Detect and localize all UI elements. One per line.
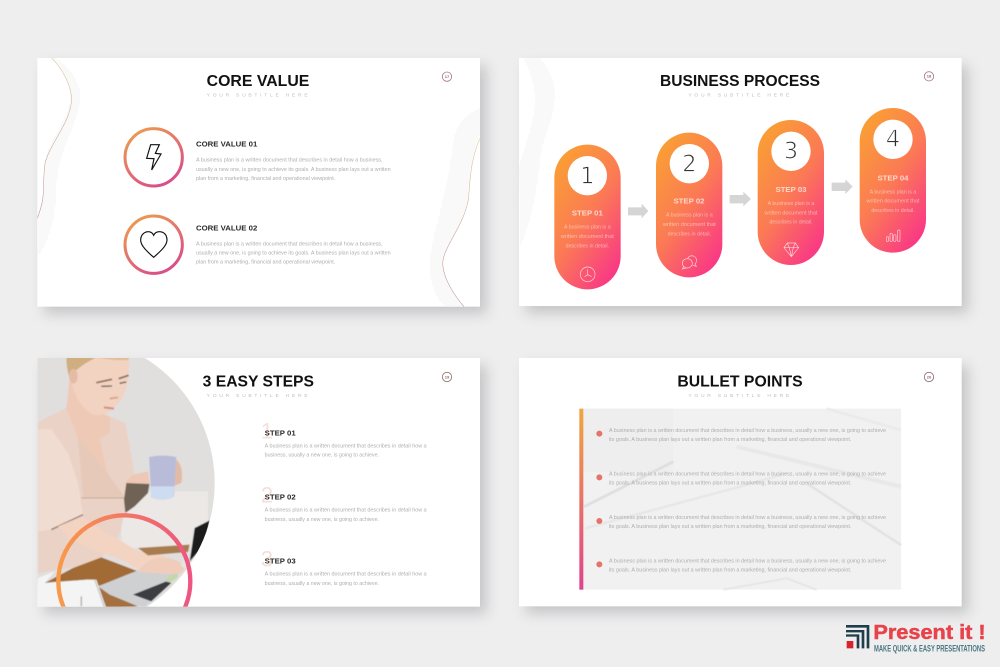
logo: Present it! (846, 622, 986, 654)
step 01: A business plan is a written document that describes in detail how a (265, 443, 427, 449)
page number: 17 (445, 74, 450, 79)
step 02: 2 (261, 483, 273, 508)
bullet 1: A business plan is a written document that describes in detail how a business, usually a new one, is going to achieve (609, 428, 886, 434)
step 03: 3 (261, 547, 273, 572)
step 1 card: 1 (580, 163, 595, 189)
step 2 card: 2 (682, 151, 697, 177)
page number (924, 372, 934, 382)
text block: core value 02: A business plan is a written document that describes in detail how a business, (196, 241, 383, 247)
bullet 3: A business plan is a written document that describes in detail how a business, usually a new one, is going to achieve (609, 515, 886, 521)
icon: chat bubbles (682, 256, 697, 269)
step 1 card: describes in detail. (566, 243, 609, 249)
page number (924, 72, 934, 81)
step 3 card: describes in detail. (769, 220, 813, 226)
arrow 2 (730, 192, 751, 206)
title: BUSINESS PROCESS (660, 73, 820, 90)
panel: business process (519, 58, 968, 313)
icon: diamond (784, 243, 799, 257)
bullet 3 (596, 515, 886, 530)
text block: core value 02: plan from a marketing, financial and operational viewpoint. (196, 260, 335, 266)
step 1 card (554, 145, 621, 289)
bullet 3: its goals. A business plan lays out a written plan from a marketing, financial and operational viewpoint. (609, 524, 851, 530)
text block: core value 02: usually a new one, is going to achieve its goals. A business plan lays out a written (196, 250, 391, 256)
step 4 card: written document that (866, 199, 920, 205)
text block: core value 01 (196, 158, 391, 182)
page number: 19 (445, 374, 450, 379)
bullet 4: A business plan is a written document that describes in detail how a business, usually a new one, is going to achieve (609, 559, 886, 565)
icon: bar chart (886, 230, 900, 241)
step 01: 1 (261, 419, 273, 444)
step 2 card: written document that (663, 222, 716, 228)
step 4 card: STEP 04 (877, 173, 909, 182)
step 01 (261, 419, 427, 459)
logo name: Present it ! (873, 622, 986, 644)
icon: heart in ring (125, 216, 182, 273)
bullet 2: its goals. A business plan lays out a written plan from a marketing, financial and operational viewpoint. (609, 480, 851, 486)
title: CORE VALUE (207, 73, 310, 90)
step 2 card: describes in detail. (668, 231, 711, 237)
step 1 card: written document that (561, 234, 614, 240)
text block: core value 01: usually a new one, is going to achieve its goals. A business plan lays out a written (196, 167, 391, 173)
photo: woman at laptop (38, 358, 215, 607)
title: 3 EASY STEPS (203, 374, 314, 391)
bullet 2 (596, 471, 886, 486)
step 3 card: 3 (784, 139, 798, 165)
panel: bullet points (519, 358, 968, 614)
step 03 (261, 547, 427, 587)
step 01: STEP 01 (265, 428, 296, 437)
icon: logo mark (846, 625, 869, 648)
heading: core value 02: CORE VALUE 02 (196, 224, 257, 233)
step 02: business, usually a new one, is going to achieve. (265, 517, 379, 523)
step 2 card: STEP 02 (673, 197, 704, 206)
step 02 (261, 483, 427, 523)
bullet 2: A business plan is a written document that describes in detail how a business, usually a new one, is going to achieve (609, 471, 886, 477)
subtitle: YOUR SUBTITLE HERE (207, 93, 308, 99)
bullet 1: its goals. A business plan lays out a written plan from a marketing, financial and operational viewpoint. (609, 437, 851, 443)
bullet 1 (596, 428, 886, 443)
icon: clock (580, 267, 595, 282)
step 4 card: describes in detail. (871, 208, 915, 214)
step 03: business, usually a new one, is going to achieve. (265, 581, 379, 587)
step 03: STEP 03 (265, 557, 296, 566)
step 3 card (758, 120, 824, 265)
text block: core value 02 (196, 241, 391, 266)
page number (442, 72, 452, 81)
icon: lightning bolt in ring (125, 129, 182, 186)
page number: 20 (927, 374, 932, 379)
background image block (579, 409, 901, 590)
step 4 card: A business plan is a (870, 189, 916, 195)
subtitle: YOUR SUBTITLE HERE (688, 393, 790, 399)
step 3 card: STEP 03 (775, 185, 806, 194)
step 1 card: STEP 01 (572, 209, 604, 218)
step 3 card: A business plan is a (768, 201, 814, 207)
subtitle: YOUR SUBTITLE HERE (207, 393, 308, 399)
page number: 18 (927, 74, 932, 79)
text block: core value 01: A business plan is a written document that describes in detail how a business, (196, 158, 383, 164)
step 2 card: A business plan is a (666, 213, 713, 219)
step 02: A business plan is a written document that describes in detail how a (265, 508, 427, 514)
step 2 card (656, 133, 722, 277)
step 03: A business plan is a written document that describes in detail how a (265, 572, 427, 578)
panel: core value (37, 58, 487, 314)
step 4 card: 4 (886, 127, 900, 153)
heading: core value 01: CORE VALUE 01 (196, 140, 258, 149)
arrow 3 (832, 179, 853, 194)
arrow 1 (628, 204, 648, 218)
bullet 4: its goals. A business plan lays out a written plan from a marketing, financial and operational viewpoint. (609, 568, 851, 574)
step 01: business, usually a new one, is going to achieve. (265, 453, 379, 459)
subtitle: YOUR SUBTITLE HERE (688, 92, 790, 98)
step 4 card (860, 108, 926, 253)
step 02: STEP 02 (265, 493, 296, 502)
step 1 card: A business plan is a (564, 225, 611, 231)
bullet 4 (596, 559, 886, 574)
gradient side bar (579, 409, 583, 590)
title: BULLET POINTS (677, 374, 803, 391)
panel: 3 easy steps (38, 358, 492, 619)
page number (442, 372, 452, 382)
text block: core value 01: plan from a marketing, financial and operational viewpoint. (196, 176, 335, 182)
step 3 card: written document that (764, 210, 818, 216)
